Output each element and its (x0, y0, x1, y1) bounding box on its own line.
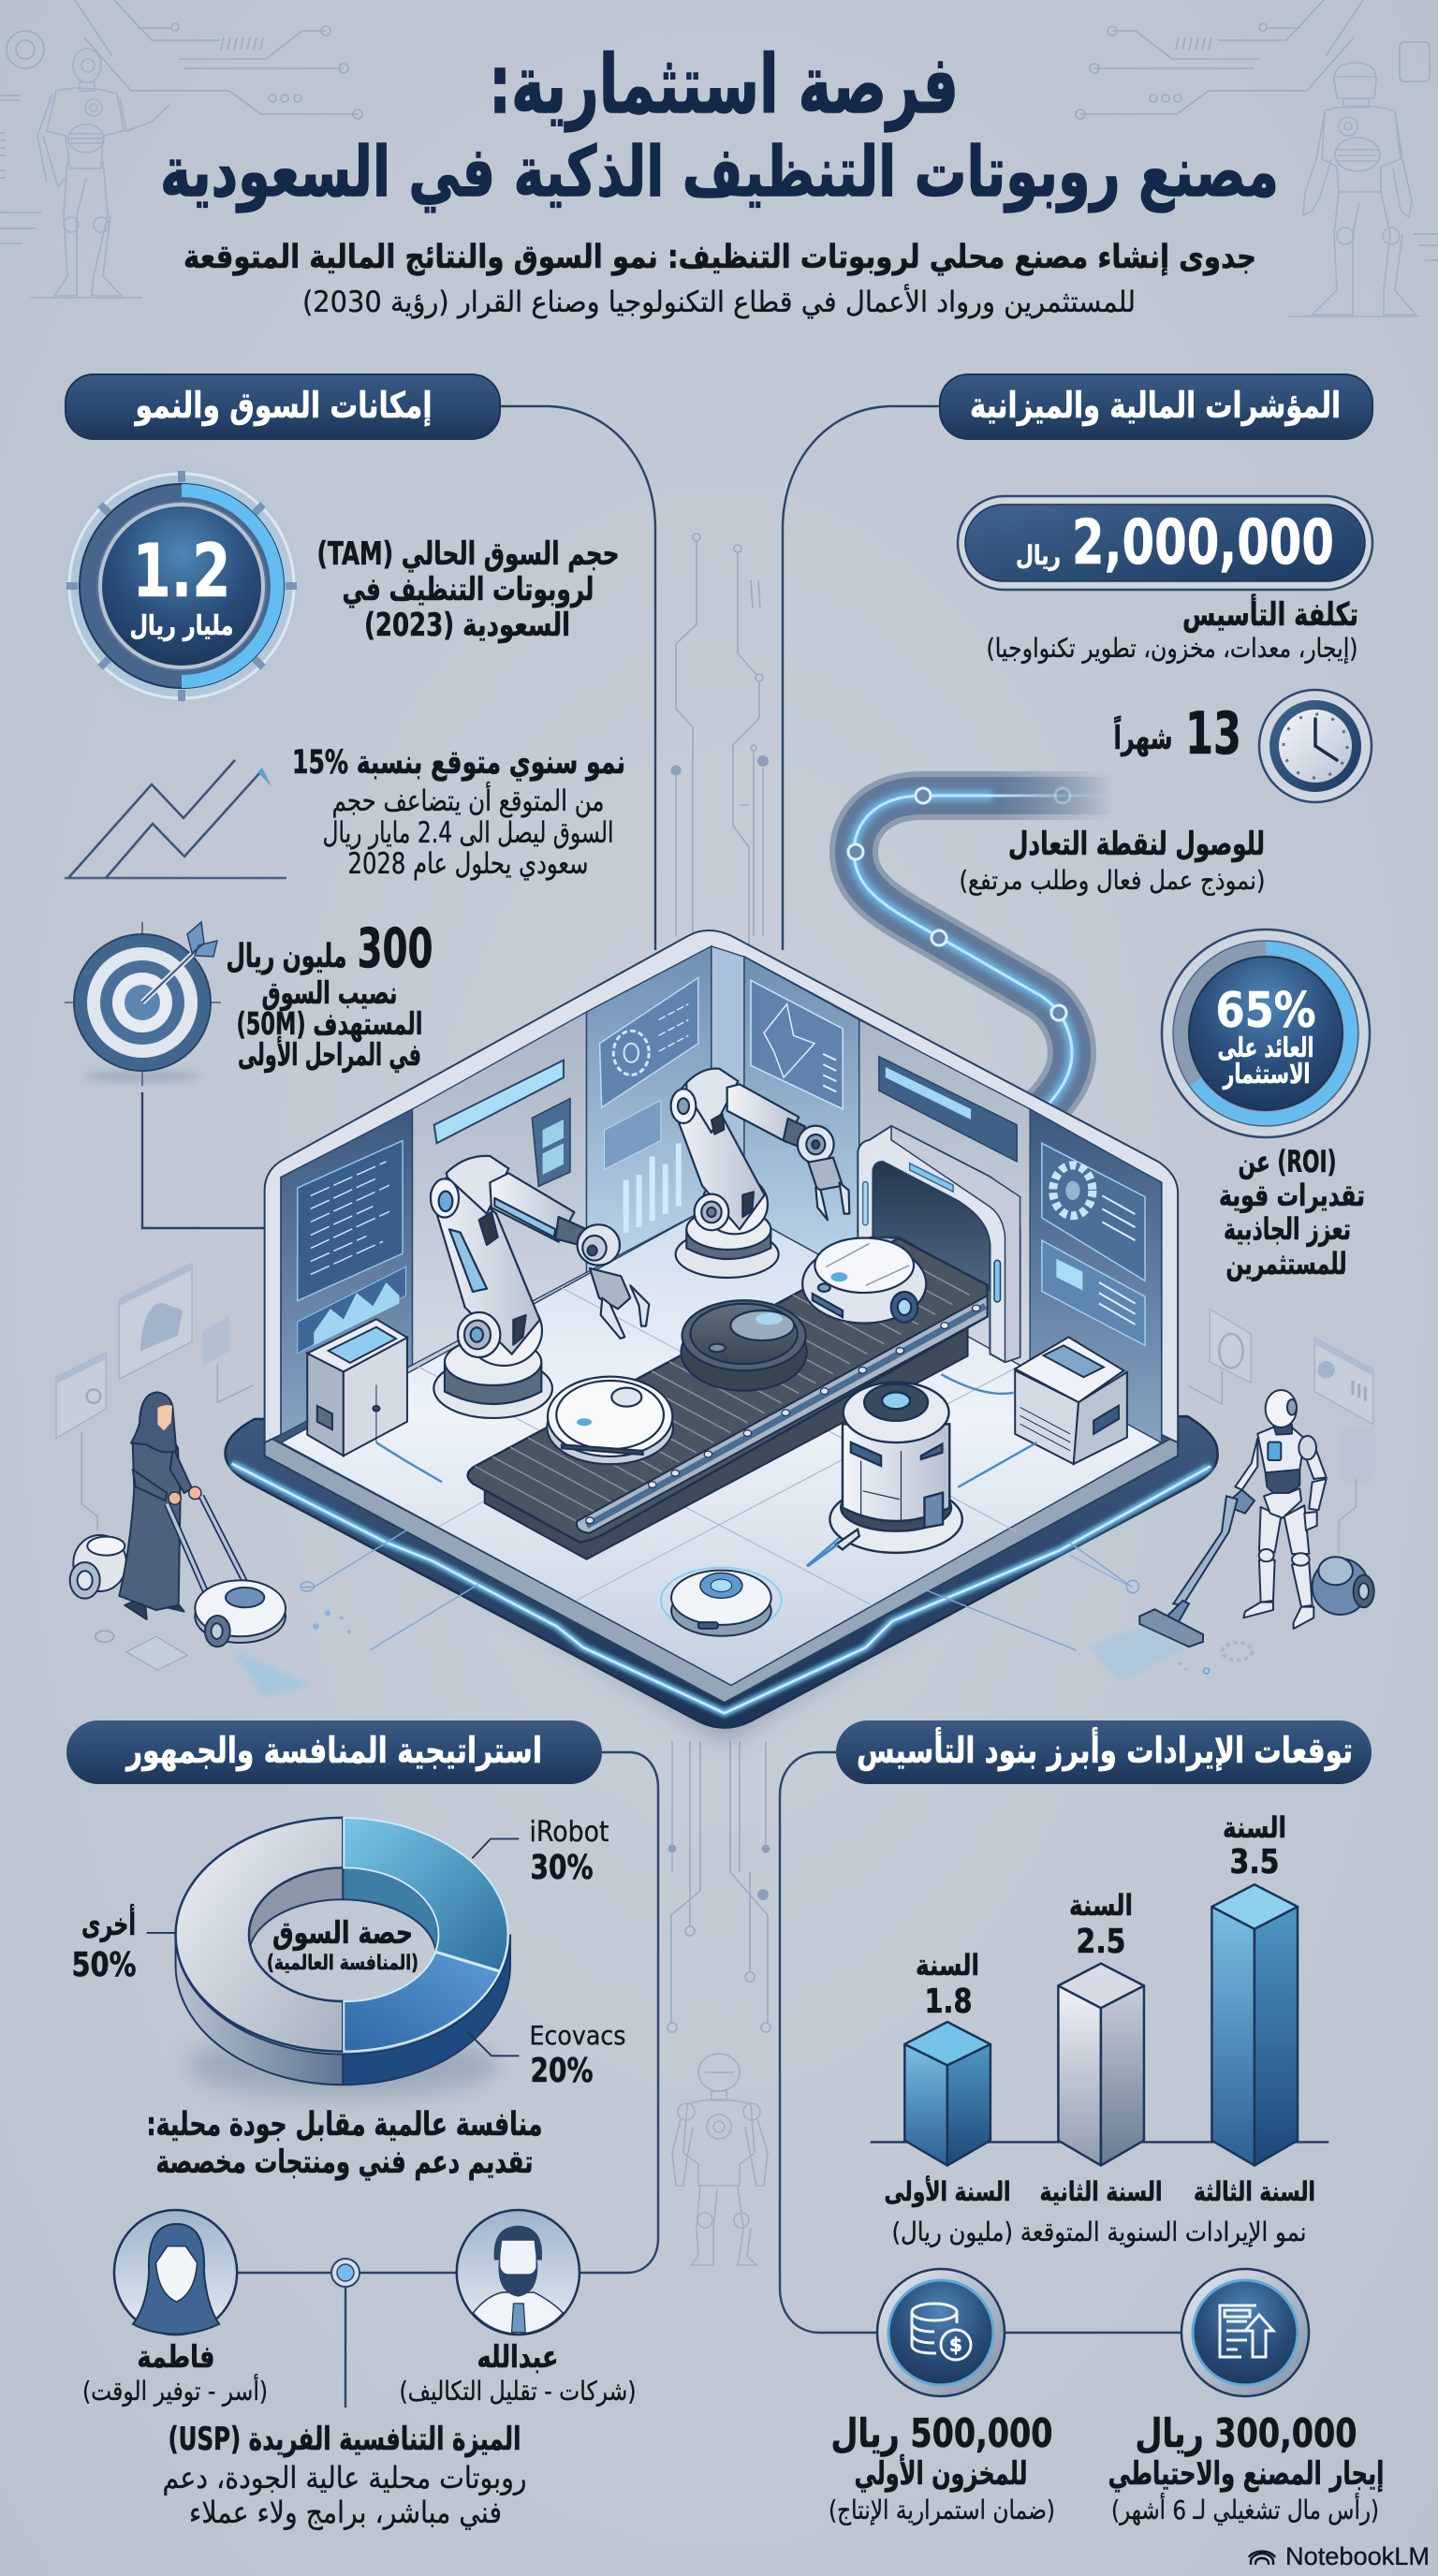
text: target market: في المراحل الأولى (238, 1035, 421, 1074)
text: ROI: (ROI) عن (1238, 1144, 1337, 1179)
leader lines (147, 1838, 519, 2056)
cost pill (958, 496, 1372, 590)
bar chart: revenue (871, 1884, 1328, 2165)
text: inventory: (ضمان استمرارية الإنتاج) (829, 2495, 1055, 2526)
donut labels: 20% (530, 2052, 594, 2090)
wall panels (281, 946, 1162, 1442)
text: break-even: للوصول لنقطة التعادل (1008, 826, 1265, 863)
audience connector (238, 2259, 456, 2408)
subtitle: للمستثمرين ورواد الأعمال في قطاع التكنولوجيا وصناع القرار (رؤية 2030) (302, 284, 1136, 319)
text: inventory: للمخزون الأولي (854, 2453, 1028, 2493)
donut center label: (المنافسة العالمية) (267, 1952, 418, 1975)
floor trace lines outside (301, 1527, 1132, 1650)
text: competition: منافسة عالمية مقابل جودة محلية: (146, 2106, 543, 2144)
text: competition (146, 2106, 543, 2181)
bar category labels: السنة الثانية (1039, 2176, 1163, 2207)
icon: clock (1259, 690, 1372, 802)
badge: ROI 65% (1162, 929, 1370, 1137)
segment others (176, 1818, 343, 2052)
text: unique selling point: روبوتات محلية عالية الجودة، دعم (163, 2460, 526, 2496)
heading pill: revenue (836, 1720, 1372, 1784)
text: market size: لروبوتات التنظيف في (343, 571, 594, 608)
platform (226, 1416, 1218, 1742)
donut labels: 30% (530, 1849, 594, 1887)
center circuit traces top (670, 534, 769, 945)
text: ROI: للمستثمرين (1226, 1246, 1346, 1281)
floor wiring (376, 1374, 1036, 1566)
subtitle (183, 239, 1256, 319)
bar category labels: السنة الأولى (884, 2175, 1011, 2207)
bar year 1 (904, 2022, 990, 2165)
avatar: Abdullah (457, 2210, 580, 2334)
tunnel arch (858, 1126, 1020, 1362)
text: break-even: (نموذج عمل فعال وطلب مرتفع) (959, 865, 1266, 897)
text: setup cost: تكلفة التأسيس (1182, 593, 1358, 634)
text: inventory: 500,000 ريال (831, 2410, 1052, 2456)
text: personas: عبدالله (477, 2338, 558, 2375)
badge: market size 1.2 (66, 471, 297, 701)
text: annual growth (292, 744, 625, 881)
icon: growth chart (65, 760, 286, 878)
bar category labels (884, 2175, 1315, 2247)
bar value labels (916, 1811, 1286, 2021)
text: personas (82, 2338, 637, 2407)
text: break-even (959, 826, 1266, 897)
text: setup cost: (إيجار، معدات، مخزون، تطوير تكنواوجيا) (987, 633, 1357, 664)
segment Ecovacs (344, 1953, 500, 2052)
wall screens (298, 978, 1145, 1354)
badge: market size 1.2: 1.2 (133, 530, 230, 614)
icon: target (65, 922, 221, 1086)
text: ROI: تقديرات قوية (1219, 1178, 1365, 1213)
text: rent: (رأس مال تشغيلي لـ 6 أشهر) (1111, 2492, 1379, 2525)
donut labels: Ecovacs (530, 2020, 625, 2051)
text: unique selling point: الميزة التنافسية الفريدة (USP) (169, 2421, 521, 2458)
left illustration: woman with cleaning robot (56, 1264, 351, 1697)
donut center label (267, 1914, 418, 1975)
bar value labels: 3.5 (1230, 1843, 1279, 1881)
subtitle: جدوى إنشاء مصنع محلي لروبوتات التنظيف: نمو السوق والنتائج المالية المتوقعة (183, 239, 1256, 276)
text: 13 months: 13 (1185, 699, 1241, 768)
text: market size: حجم السوق الحالي (TAM) (316, 535, 620, 573)
center circuit traces bottom (668, 1741, 770, 2032)
header robot left (31, 49, 169, 298)
heading pill: competition (66, 1720, 602, 1784)
bar value labels: 1.8 (925, 1983, 972, 2021)
serpentine path (848, 788, 1114, 1114)
text: target market: نصيب السوق (262, 974, 397, 1012)
bar category labels: السنة الثالثة (1194, 2176, 1315, 2207)
text: competition: تقديم دعم فني ومنتجات مخصصة (155, 2144, 534, 2181)
robot arm back (671, 1069, 849, 1278)
badge: market size 1.2: مليار ريال (129, 609, 234, 641)
header robot right (1288, 63, 1419, 316)
console machine (307, 1319, 407, 1456)
icon: inventory coins (877, 2269, 1005, 2396)
heading pill: market: إمكانات السوق والنمو (134, 385, 433, 427)
dust trail (1070, 1556, 1253, 1682)
ghost center robot (672, 2054, 768, 2265)
header circuit decoration right (1076, 0, 1438, 260)
small floor robot (661, 1568, 782, 1636)
text: market size (316, 535, 620, 644)
icon: rent document (1181, 2269, 1309, 2396)
text: inventory (829, 2410, 1055, 2526)
donut labels: أخرى (81, 1904, 136, 1943)
donut labels: 50% (71, 1946, 137, 1984)
bar year 2 (1058, 1964, 1144, 2165)
badge: ROI 65%: الاستثمار (1222, 1058, 1311, 1090)
donut labels: iRobot (530, 1816, 609, 1849)
cost pill: 2,000,000 (1072, 506, 1334, 578)
text: 13 months (1114, 699, 1241, 768)
icon: inventory coins: $ (949, 2334, 962, 2356)
text: unique selling point: فني مباشر، برامج ولاء عملاء (189, 2495, 502, 2530)
text: target market (227, 916, 433, 1074)
avatar: Fatima (114, 2210, 237, 2334)
badge: ROI 65%: العائد على (1217, 1032, 1314, 1063)
text: annual growth: نمو سنوي متوقع بنسبة %15 (292, 744, 625, 782)
text: setup cost (987, 593, 1358, 664)
tall cleaning robot (807, 1383, 962, 1566)
text: ROI (1219, 1144, 1365, 1281)
donut hole walls (249, 1867, 343, 1954)
robot vacuum: middle dark (681, 1300, 807, 1391)
conveyor belt (468, 1238, 988, 1559)
text: personas: (أسر - توفير الوقت) (82, 2373, 268, 2407)
push handles (167, 1496, 246, 1607)
robot figure (1235, 1390, 1327, 1629)
floating windows (56, 1264, 254, 1530)
heading pill: financial (940, 374, 1372, 439)
bar year 3 (1211, 1884, 1298, 2165)
title (160, 38, 1279, 213)
text: target market: 300 (358, 916, 433, 980)
text: 13 months: شهراً (1114, 715, 1172, 757)
wall frame (265, 930, 1178, 1442)
robot vacuum: far white (802, 1237, 926, 1324)
factory structure (226, 930, 1218, 1742)
floor debris (95, 1582, 351, 1670)
bar value labels: 2.5 (1077, 1923, 1125, 1961)
canister (1313, 1557, 1374, 1615)
bar value labels: السنة (1223, 1811, 1286, 1845)
segment iRobot (344, 1818, 508, 1970)
heading pill: market (66, 374, 500, 439)
floor (281, 1201, 1162, 1685)
printer machine (1015, 1337, 1127, 1464)
text: target market: المستهدف (50M) (236, 1005, 423, 1043)
bar category labels: نمو الإيرادات السنوية المتوقعة (مليون ريال) (891, 2217, 1307, 2247)
bar value labels: السنة (1069, 1889, 1133, 1923)
bar value labels: السنة (916, 1949, 979, 1983)
text: rent: 300,000 ريال (1135, 2410, 1357, 2456)
stick vacuum (1139, 1490, 1255, 1647)
cost pill: ريال (1016, 540, 1061, 571)
woman figure (119, 1392, 201, 1619)
text: rent (1108, 2410, 1384, 2525)
donut center label: حصة السوق (272, 1914, 413, 1952)
connector between icons (1005, 2332, 1182, 2334)
floor grid (392, 1264, 1023, 1605)
badge: ROI 65%: 65% (1215, 983, 1316, 1039)
text: annual growth: سعودي يحلول عام 2028 (348, 847, 588, 881)
cleaning machine (195, 1580, 312, 1697)
text: annual growth: من المتوقع أن يتضاعف حجم (331, 782, 605, 818)
robot vacuum: front white (547, 1377, 673, 1464)
right illustration: robot with vacuum (1070, 1309, 1374, 1682)
back vacuum (70, 1535, 126, 1599)
text: ROI: تعزز الجاذبية (1224, 1211, 1351, 1247)
donut side (176, 1935, 510, 2085)
NotebookLM logo: NotebookLM (1285, 2542, 1430, 2570)
header circuit decoration left (0, 0, 362, 243)
floating windows (1188, 1309, 1374, 1554)
robot arm front (431, 1156, 649, 1418)
text: annual growth: السوق ليصل الى 2.4 مايار ريال (322, 816, 614, 850)
heading pill: competition: استراتيجية المنافسة والجمهور (125, 1730, 542, 1772)
text: personas: فاطمة (137, 2338, 215, 2375)
connector lines (142, 406, 940, 2333)
text: market size: السعودية (2023) (364, 607, 570, 644)
text: target market: مليون ريال (227, 938, 346, 975)
donut labels (71, 1816, 625, 2090)
text: personas: (شركات - تقليل التكاليف) (399, 2376, 637, 2407)
title: فرصة استثمارية: (489, 38, 959, 132)
donut chart: market share (147, 1818, 519, 2099)
text: unique selling point (163, 2421, 526, 2530)
